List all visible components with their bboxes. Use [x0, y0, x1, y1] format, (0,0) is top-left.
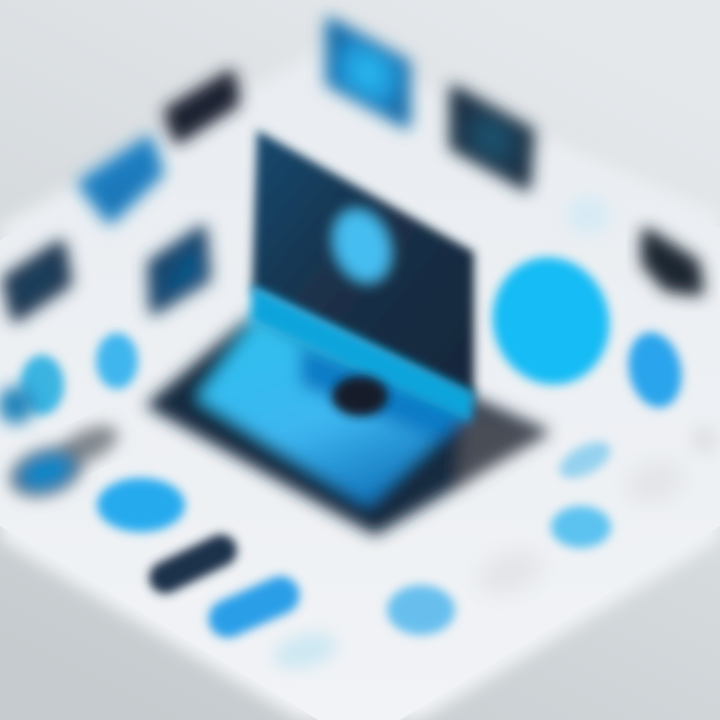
- icon: blue ellipse lower left: [97, 478, 185, 532]
- icon: grey faint blob bottom: [471, 542, 549, 602]
- icon: grey faint blob far right: [691, 426, 719, 454]
- cyan hinge band: [250, 285, 474, 422]
- icon: small blue circle right: [622, 327, 688, 413]
- screen glow circle: [323, 201, 401, 291]
- icon: top dark tile: [454, 90, 530, 186]
- laptop screen: [252, 130, 474, 400]
- icon: large blue circle right: [478, 244, 624, 398]
- icon: grey pill left: [53, 418, 123, 472]
- icon: dark tile right: [647, 234, 698, 290]
- icon: small blue circle left: [96, 333, 138, 389]
- icon: pale tile upper right: [566, 195, 610, 235]
- icon: blue circle far left: [20, 355, 64, 415]
- icon: dark pill bottom: [144, 529, 242, 599]
- keyboard dark spot: [332, 376, 388, 416]
- icon: blue pill bottom: [202, 570, 306, 644]
- icon: top blue tile: [330, 22, 406, 124]
- icon: light blue ellipse bottom: [387, 585, 455, 635]
- icon: dark blue tile centre left: [152, 230, 206, 310]
- icon: pale pill bottom: [270, 627, 340, 675]
- laptop: [150, 130, 545, 532]
- icon: pale pill right: [554, 434, 616, 486]
- icon: blue dark pill left: [4, 439, 88, 505]
- icon: dark blue tile left: [8, 246, 66, 316]
- icon: blue sliver edge: [0, 386, 34, 424]
- icon: blue ellipse lower right: [551, 506, 611, 548]
- icon: grey faint blob right: [620, 453, 690, 511]
- icon: dark pill upper left: [170, 76, 234, 138]
- laptop base: [150, 320, 545, 532]
- icon: blue pill upper left: [84, 142, 158, 218]
